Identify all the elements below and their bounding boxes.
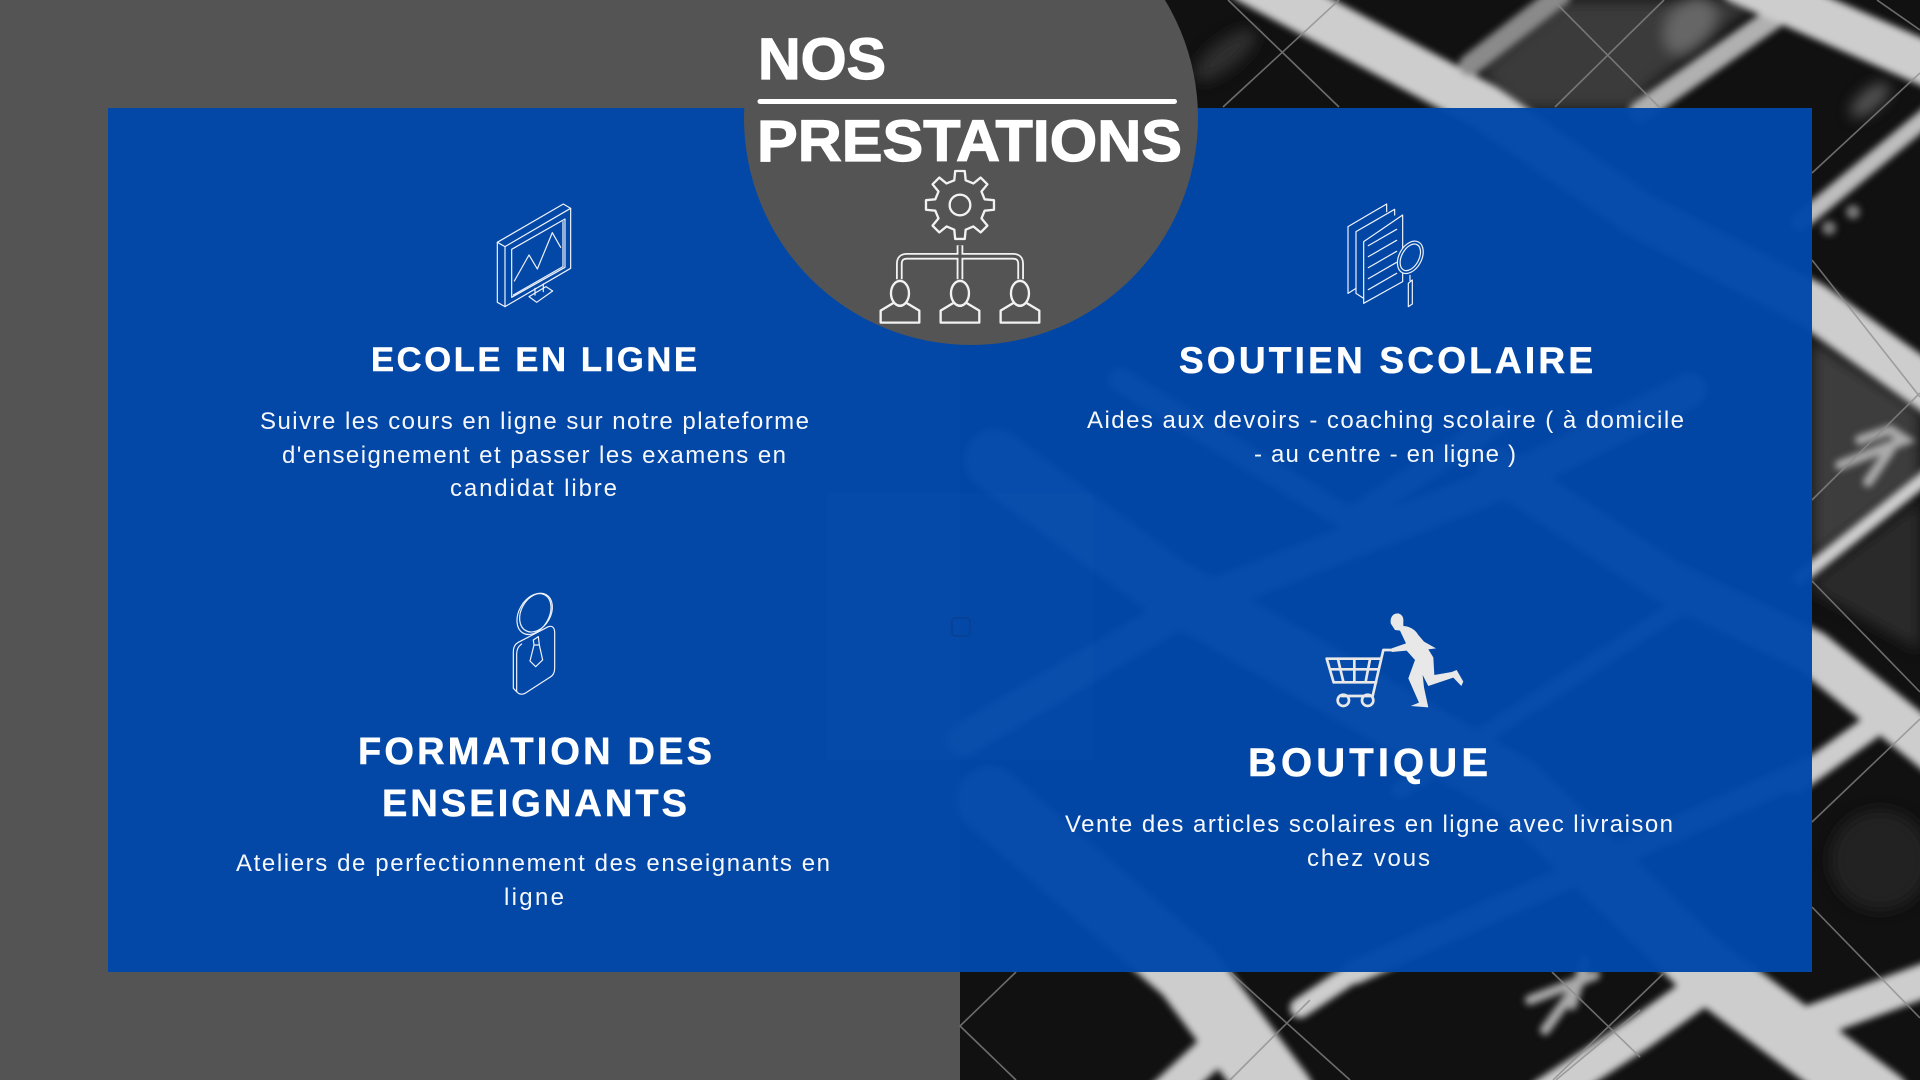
description: - au centre - en ligne ) [1254, 441, 1516, 468]
icon: gear and team hierarchy [881, 171, 1039, 323]
description: chez vous [1307, 845, 1430, 872]
heading: ENSEIGNANTS [382, 783, 687, 825]
background: keyboard photo, right half [960, 0, 1920, 1080]
description [260, 408, 809, 502]
hierarchy connectors [899, 245, 1021, 279]
description [1087, 407, 1684, 468]
service: formation des enseignants [236, 587, 830, 911]
heading [358, 731, 712, 825]
description: Ateliers de perfectionnement des enseignants en [236, 850, 830, 877]
service: soutien scolaire [1087, 204, 1684, 468]
background: left grey half [0, 0, 960, 1080]
heading: BOUTIQUE [1248, 741, 1488, 785]
service: boutique [1065, 613, 1673, 872]
description: ligne [504, 884, 564, 911]
faint placeholder icon [952, 618, 970, 636]
service: ecole en ligne [260, 204, 809, 502]
description: Suivre les cours en ligne sur notre plateforme [260, 408, 809, 435]
heading: SOUTIEN SCOLAIRE [1179, 340, 1593, 381]
description: Aides aux devoirs - coaching scolaire ( à domicile [1087, 407, 1684, 434]
description: d'enseignement et passer les examens en [282, 442, 786, 469]
description: candidat libre [450, 475, 617, 502]
blue content panel [108, 108, 1812, 972]
title circle [744, 0, 1198, 345]
description: Vente des articles scolaires en ligne avec livraison [1065, 811, 1673, 838]
heading: FORMATION DES [358, 731, 712, 773]
icon: man pushing shopping cart [1327, 613, 1463, 707]
description [236, 850, 830, 911]
description [1065, 811, 1673, 872]
icon: monitor with chart [497, 204, 571, 307]
gear [926, 171, 994, 239]
title word: PRESTATIONS: PRESTATIONS [757, 109, 1182, 174]
title [757, 27, 1182, 174]
icon: documents and magnifier [1348, 204, 1428, 307]
cart [1327, 650, 1393, 706]
three people [881, 281, 1039, 323]
faint square inside panel [827, 493, 1093, 760]
icon: teacher with tie [510, 587, 559, 694]
title word: NOS: NOS [758, 27, 886, 92]
title underline [758, 99, 1177, 104]
heading: ECOLE EN LIGNE [371, 341, 697, 379]
man silhouette [1391, 613, 1463, 707]
